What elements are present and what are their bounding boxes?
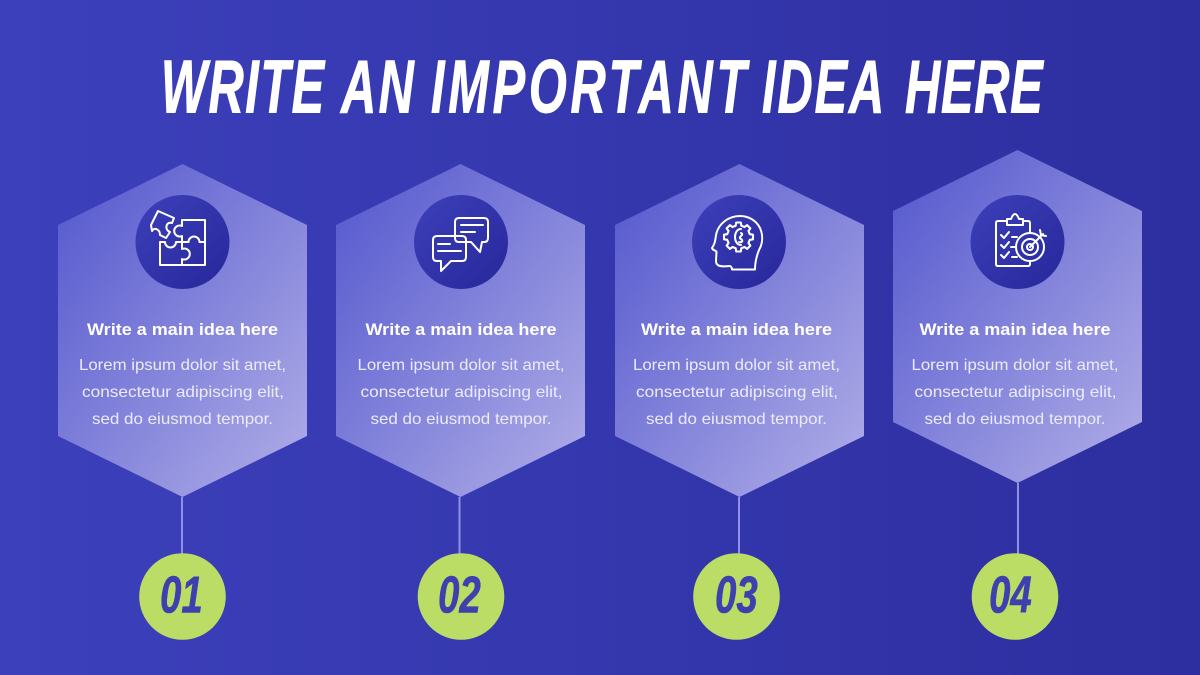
number badge 1: [139, 553, 226, 640]
number badge 4: [972, 553, 1058, 640]
heading 4: Write a main idea here: [920, 320, 1110, 339]
text block 2: Lorem ipsum dolor sit amet,: [358, 357, 564, 374]
text block 4: consectetur adipiscing elit,: [914, 384, 1116, 401]
heading 1: Write a main idea here: [87, 320, 278, 339]
connector 2: [458, 497, 460, 554]
icon: head with gear: [692, 195, 786, 289]
panel: step 2: [336, 164, 585, 497]
text block 3: sed do eiusmod tempor.: [646, 411, 827, 428]
icon: chat bubbles: [414, 195, 508, 289]
panel: step 3: [615, 164, 864, 497]
title: WRITE: [161, 46, 326, 129]
number badge 3: 03: [715, 566, 758, 624]
text block 2: sed do eiusmod tempor.: [370, 411, 552, 428]
title: AN: [339, 46, 415, 129]
hexagon 2: [336, 164, 585, 497]
text block 2: consectetur adipiscing elit,: [360, 384, 562, 401]
text block 1: [79, 357, 286, 428]
number badge 4: 04: [989, 566, 1032, 624]
text block 3: consectetur adipiscing elit,: [636, 384, 838, 401]
icon: puzzle: [136, 195, 230, 289]
panel: step 4: [893, 150, 1142, 483]
connector 3: [738, 497, 740, 554]
number badge 2: 02: [438, 566, 481, 624]
number badge 3: [693, 553, 780, 640]
text block 1: Lorem ipsum dolor sit amet,: [79, 357, 286, 374]
text block 4: sed do eiusmod tempor.: [924, 411, 1106, 428]
text block 4: Lorem ipsum dolor sit amet,: [912, 357, 1118, 374]
icon: clipboard and target: [970, 195, 1064, 289]
text block 4: [912, 357, 1118, 428]
heading 2: Write a main idea here: [366, 320, 556, 339]
hexagon 4: [893, 150, 1142, 483]
text block 3: Lorem ipsum dolor sit amet,: [633, 357, 840, 374]
number badge 1: 01: [160, 566, 203, 624]
title: HERE: [905, 46, 1044, 129]
text block 1: sed do eiusmod tempor.: [92, 411, 273, 428]
text block 2: [358, 357, 564, 428]
heading 3: Write a main idea here: [641, 320, 832, 339]
hexagon 3: [615, 164, 864, 497]
number badge 2: [418, 553, 504, 640]
title: IDEA: [762, 46, 884, 129]
panel: step 1: [58, 164, 307, 497]
connector 1: [181, 497, 183, 554]
connector 4: [1017, 483, 1019, 554]
title: [161, 46, 1044, 129]
text block 3: [633, 357, 840, 428]
hexagon 1: [58, 164, 307, 497]
text block 1: consectetur adipiscing elit,: [82, 384, 284, 401]
title: IMPORTANT: [431, 46, 750, 129]
